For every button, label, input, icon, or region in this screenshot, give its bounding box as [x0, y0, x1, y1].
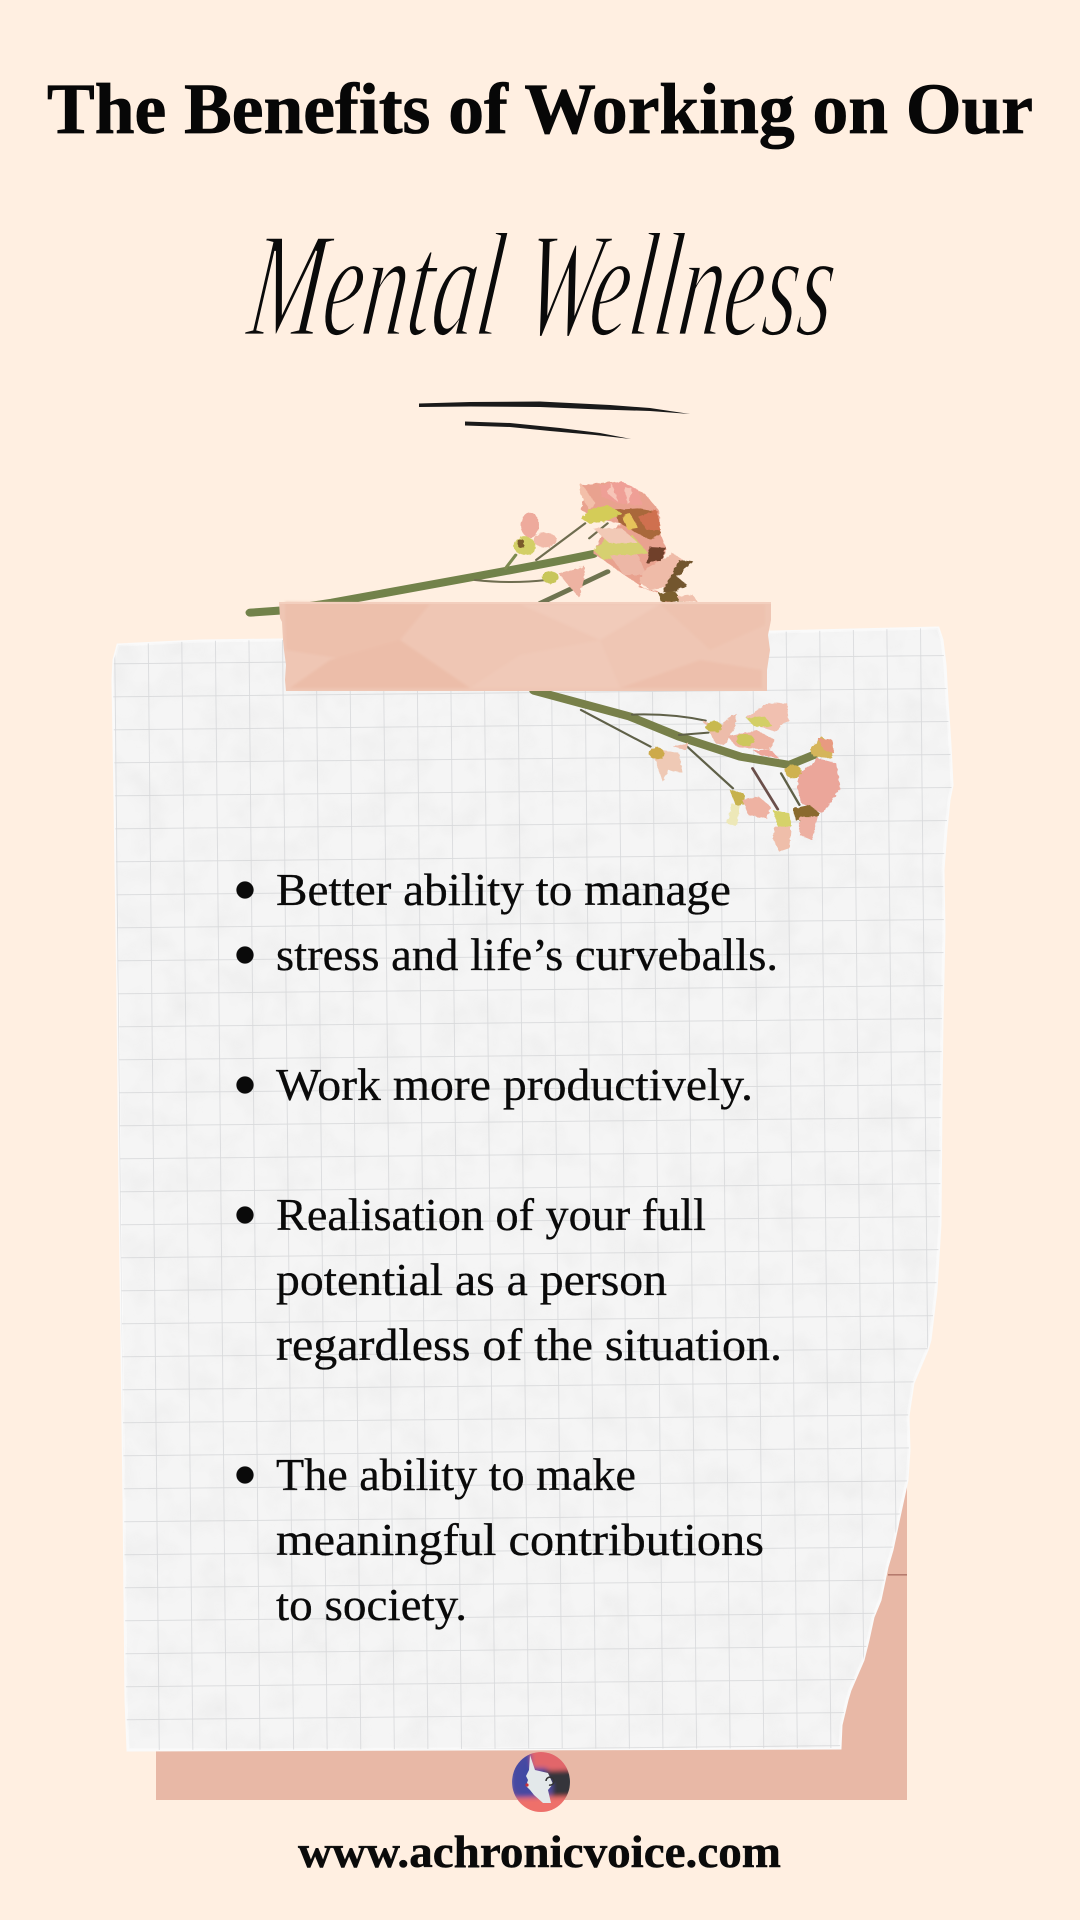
bullet 4: contributions: to society.	[276, 1579, 467, 1630]
bullet 1: stress: stress and life’s curveballs.	[276, 929, 778, 980]
bullet 4: contributions	[236, 1449, 764, 1630]
bullet 2: productivity: Work more productively.	[276, 1059, 753, 1110]
bullet 3: full potential: potential as a person	[276, 1254, 667, 1305]
bullet 3: full potential	[236, 1189, 782, 1370]
brush underline strokes	[419, 402, 690, 439]
panel: torn grid paper	[113, 628, 952, 1750]
icon: dried flower sprig, lower	[534, 691, 840, 852]
script heading: Mental Wellness: Mental Wellness	[240, 202, 845, 367]
bullet 1: stress: Better ability to manage	[276, 864, 731, 915]
panel: pink backing paper	[156, 1470, 907, 1800]
bullet 3: full potential: regardless of the situation.	[276, 1319, 782, 1370]
icon: dried flower sprig, upper	[250, 482, 697, 613]
washi tape	[279, 602, 771, 691]
footer website: www.achronicvoice.com	[298, 1826, 781, 1877]
bullet 3: full potential: Realisation of your full	[276, 1189, 706, 1240]
bullet 4: contributions: meaningful contributions	[276, 1514, 764, 1565]
title: The Benefits of Working on Our	[47, 69, 1033, 149]
bullet 1: stress	[236, 864, 778, 980]
icon: logo, woman's profile	[512, 1752, 570, 1812]
bullet list	[236, 864, 782, 1630]
bullet 4: contributions: The ability to make	[276, 1449, 636, 1500]
